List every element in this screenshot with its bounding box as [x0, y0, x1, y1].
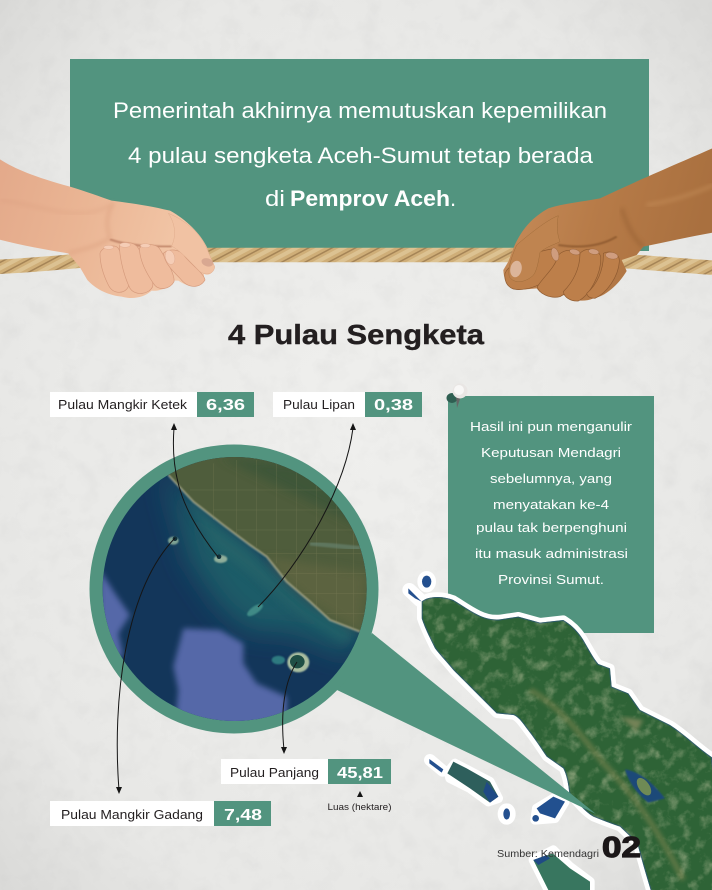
panel: headline: [70, 59, 649, 251]
note text: sebelumnya, yang: [490, 471, 612, 486]
left fingers: [100, 243, 205, 294]
note text: pulau tak berpenghuni: [476, 520, 627, 535]
map: Sumatra with islands: [408, 576, 712, 890]
title: 4 Pulau Sengketa: [228, 319, 484, 350]
label: Pulau Mangkir Ketek: 6,36: [206, 397, 245, 414]
headline text: 4 pulau sengketa Aceh-Sumut tetap berada: [128, 143, 594, 168]
map inset: satellite close-up: [100, 450, 380, 727]
label: Pulau Panjang: [221, 759, 391, 784]
arrow: Pulau Panjang: [281, 662, 297, 754]
islands fill: [408, 576, 590, 890]
label: Pulau Lipan: [273, 392, 422, 417]
left fingernails: [104, 243, 176, 266]
label: Pulau Panjang: Pulau Panjang: [230, 766, 319, 780]
label: Pulau Panjang: 45,81: [337, 765, 383, 782]
label: Pulau Lipan: Pulau Lipan: [283, 398, 355, 412]
headline text: Pemprov Aceh: [290, 186, 450, 211]
periwinkle deep water: [100, 570, 287, 727]
headline text: Pemerintah akhirnya memutuskan kepemilikan: [113, 98, 607, 123]
headline text: [113, 98, 607, 211]
label: Pulau Mangkir Gadang: [50, 801, 271, 826]
panel: note: [448, 396, 654, 633]
left hand pulling rope: [0, 158, 215, 298]
label: Pulau Mangkir Ketek: Pulau Mangkir Ketek: [58, 398, 188, 412]
note text: Hasil ini pun menganulir: [470, 419, 633, 434]
page number: 02: [602, 832, 641, 864]
source text: Sumber: Kemendagri: [497, 848, 599, 860]
headline text: .: [450, 186, 456, 211]
pointer wedge and magnifier ring: [90, 444, 596, 814]
right thumb: [509, 216, 560, 282]
map outline: [409, 576, 712, 890]
note text: Keputusan Mendagri: [481, 445, 621, 460]
label: Pulau Lipan: 0,38: [374, 397, 413, 414]
teal shallows: [163, 470, 363, 657]
arrow: Pulau Mangkir Ketek: [171, 423, 218, 557]
right fingers: [505, 249, 619, 301]
label: Pulau Mangkir Gadang: 7,48: [224, 807, 262, 824]
arrow: Pulau Lipan: [258, 423, 356, 607]
legend: area unit: [328, 791, 392, 812]
icon: push pin: [446, 384, 468, 408]
note text: menyatakan ke-4: [493, 497, 609, 512]
label: Pulau Mangkir Gadang: Pulau Mangkir Gadang: [61, 808, 203, 822]
mainland terrain: [410, 590, 712, 890]
land: [168, 450, 380, 632]
note text: Provinsi Sumut.: [498, 572, 604, 587]
arrow: Pulau Mangkir Gadang: [116, 538, 175, 794]
rope: [0, 255, 712, 268]
legend: area unit: Luas (hektare): [328, 802, 392, 812]
right fingernails: [550, 247, 618, 262]
left thumb: [168, 213, 215, 274]
label: Pulau Mangkir Ketek: [50, 392, 254, 417]
headline text: di: [265, 186, 285, 211]
right hand pulling rope: [503, 148, 712, 301]
note text: [470, 419, 633, 587]
note text: itu masuk administrasi: [475, 546, 628, 561]
reefs: [168, 537, 309, 672]
